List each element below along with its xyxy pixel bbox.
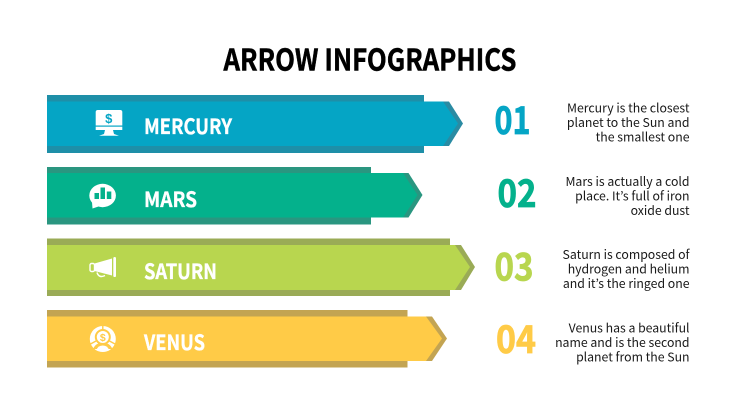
text: venus description: Venus has a beautiful — [569, 318, 690, 336]
text: saturn description: and it’s the ringed one — [563, 274, 690, 292]
icon: pie chart with person and dollar — [90, 326, 116, 352]
icon: monitor with dollar — [96, 110, 122, 136]
text: venus description: planet from the Sun — [576, 347, 690, 365]
text: mercury description: Mercury is the closest — [567, 99, 690, 117]
number 02: 02 — [498, 163, 536, 218]
label: saturn: SATURN — [144, 256, 217, 286]
panel: mercury arrow — [47, 95, 463, 153]
label: mars: MARS — [144, 184, 197, 214]
icon: speech bubble with chart — [89, 184, 116, 208]
number 01: 01 — [494, 90, 530, 145]
title: ARROW INFOGRAPHICS — [223, 36, 516, 80]
text: saturn description: Saturn is composed of — [563, 245, 691, 263]
text: mars description: Mars is actually a cold — [565, 172, 690, 190]
text: mercury description: the smallest one — [596, 128, 690, 146]
icon: pie chart with person and dollar: $ — [100, 332, 106, 344]
text: mars description: oxide dust — [631, 201, 690, 219]
text: mercury description: planet to the Sun and — [567, 113, 690, 131]
label: venus: VENUS — [143, 327, 205, 357]
number 03: 03 — [494, 236, 534, 292]
panel: saturn arrow — [47, 238, 475, 296]
text: saturn description: hydrogen and helium — [568, 259, 690, 277]
panel: venus arrow — [47, 310, 447, 368]
label: mercury: MERCURY — [144, 111, 233, 141]
panel: mars arrow — [47, 167, 422, 224]
text: venus description: name and is the second — [555, 333, 690, 351]
icon: monitor with dollar: $ — [105, 111, 113, 126]
number 04: 04 — [496, 309, 536, 364]
text: mars description: place. It’s full of iron — [575, 187, 690, 205]
icon: megaphone — [90, 257, 116, 277]
